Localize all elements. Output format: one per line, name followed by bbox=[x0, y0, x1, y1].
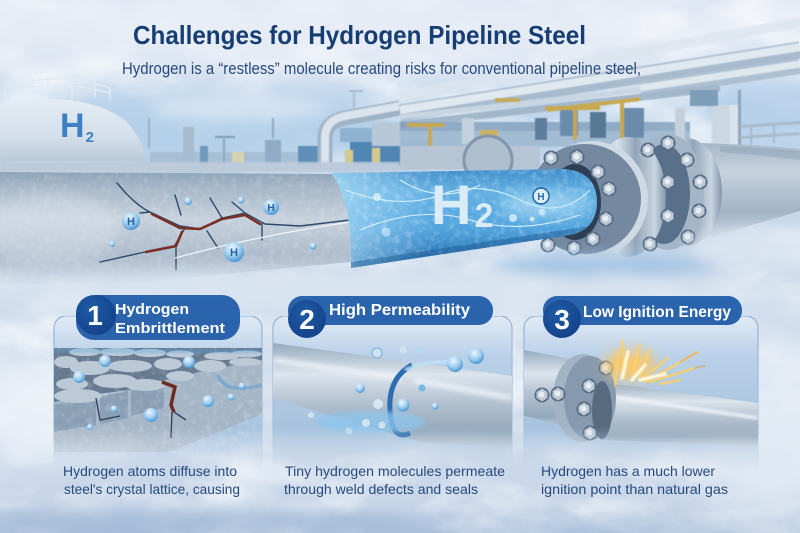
mist around pipeline base bbox=[40, 227, 800, 300]
subtitle: Hydrogen is a “restless” molecule creating risks for conventional pipeline steel, bbox=[122, 60, 641, 78]
panel 3 description: Hydrogen has a much lower bbox=[541, 463, 715, 479]
elbow pipe bbox=[325, 108, 400, 166]
panel 1 title badge: Hydrogen bbox=[115, 302, 189, 318]
hydrogen bubbles on steel: H bbox=[267, 202, 275, 214]
panel 1 title badge: 1 bbox=[87, 300, 103, 331]
panel 2: high permeability bbox=[273, 296, 512, 497]
panel 2 title badge: High Permeability bbox=[329, 302, 470, 319]
hydrogen bubbles on steel: H bbox=[230, 247, 238, 259]
transparent hydrogen pipe section bbox=[332, 169, 597, 268]
tank railing bbox=[5, 76, 110, 100]
panel 3: low ignition energy bbox=[524, 296, 758, 497]
panel 3 title badge: Low Ignition Energy bbox=[583, 304, 731, 321]
crack bbox=[100, 183, 350, 270]
hydrogen bubble in pipe bbox=[533, 188, 549, 204]
panel 2 description: Tiny hydrogen molecules permeate bbox=[285, 463, 505, 479]
right steel pipe bbox=[700, 143, 800, 240]
background industrial plant bbox=[148, 22, 800, 184]
main pipeline bbox=[0, 134, 800, 283]
panel 3 title badge: 3 bbox=[554, 304, 570, 335]
hydrogen bubble in pipe: H bbox=[537, 192, 545, 203]
flange bolts bbox=[540, 136, 708, 256]
hydrogen bubbles on steel: H bbox=[127, 216, 135, 228]
plant machinery bbox=[400, 122, 690, 146]
flange assembly bbox=[529, 134, 722, 257]
overhead pipe racks bbox=[400, 22, 800, 96]
panel 1 description: steel's crystal lattice, causing bbox=[64, 481, 240, 497]
panel 2 frame and illustration bbox=[273, 316, 512, 480]
panel 2 description: through weld defects and seals bbox=[284, 481, 478, 497]
panel 1 title badge bbox=[76, 295, 240, 340]
hydrogen bubbles on steel bbox=[109, 196, 316, 262]
tank H2 text: 2 bbox=[86, 129, 94, 146]
panel 1: hydrogen embrittlement bbox=[54, 295, 262, 497]
panel 1 description: Hydrogen atoms diffuse into bbox=[63, 463, 237, 479]
panel 3 title badge bbox=[543, 296, 742, 338]
panel 1 frame and illustration bbox=[54, 316, 262, 480]
H2 label on pipe: H bbox=[431, 173, 471, 236]
panel 1 title badge: Embrittlement bbox=[115, 321, 225, 337]
cracked steel pipe section bbox=[0, 172, 360, 284]
panel 2 title badge bbox=[288, 296, 493, 338]
panel 2 title badge: 2 bbox=[299, 304, 315, 335]
yellow gantries bbox=[407, 99, 640, 170]
panel 3 description: ignition point than natural gas bbox=[541, 481, 728, 497]
title: Challenges for Hydrogen Pipeline Steel bbox=[133, 20, 586, 50]
panel 3 frame and illustration bbox=[524, 316, 758, 480]
H2 label on pipe: 2 bbox=[474, 197, 493, 235]
storage tank with H2 label bbox=[0, 76, 400, 172]
tank H2 text: H bbox=[60, 107, 85, 145]
midground vessel bbox=[400, 146, 540, 170]
